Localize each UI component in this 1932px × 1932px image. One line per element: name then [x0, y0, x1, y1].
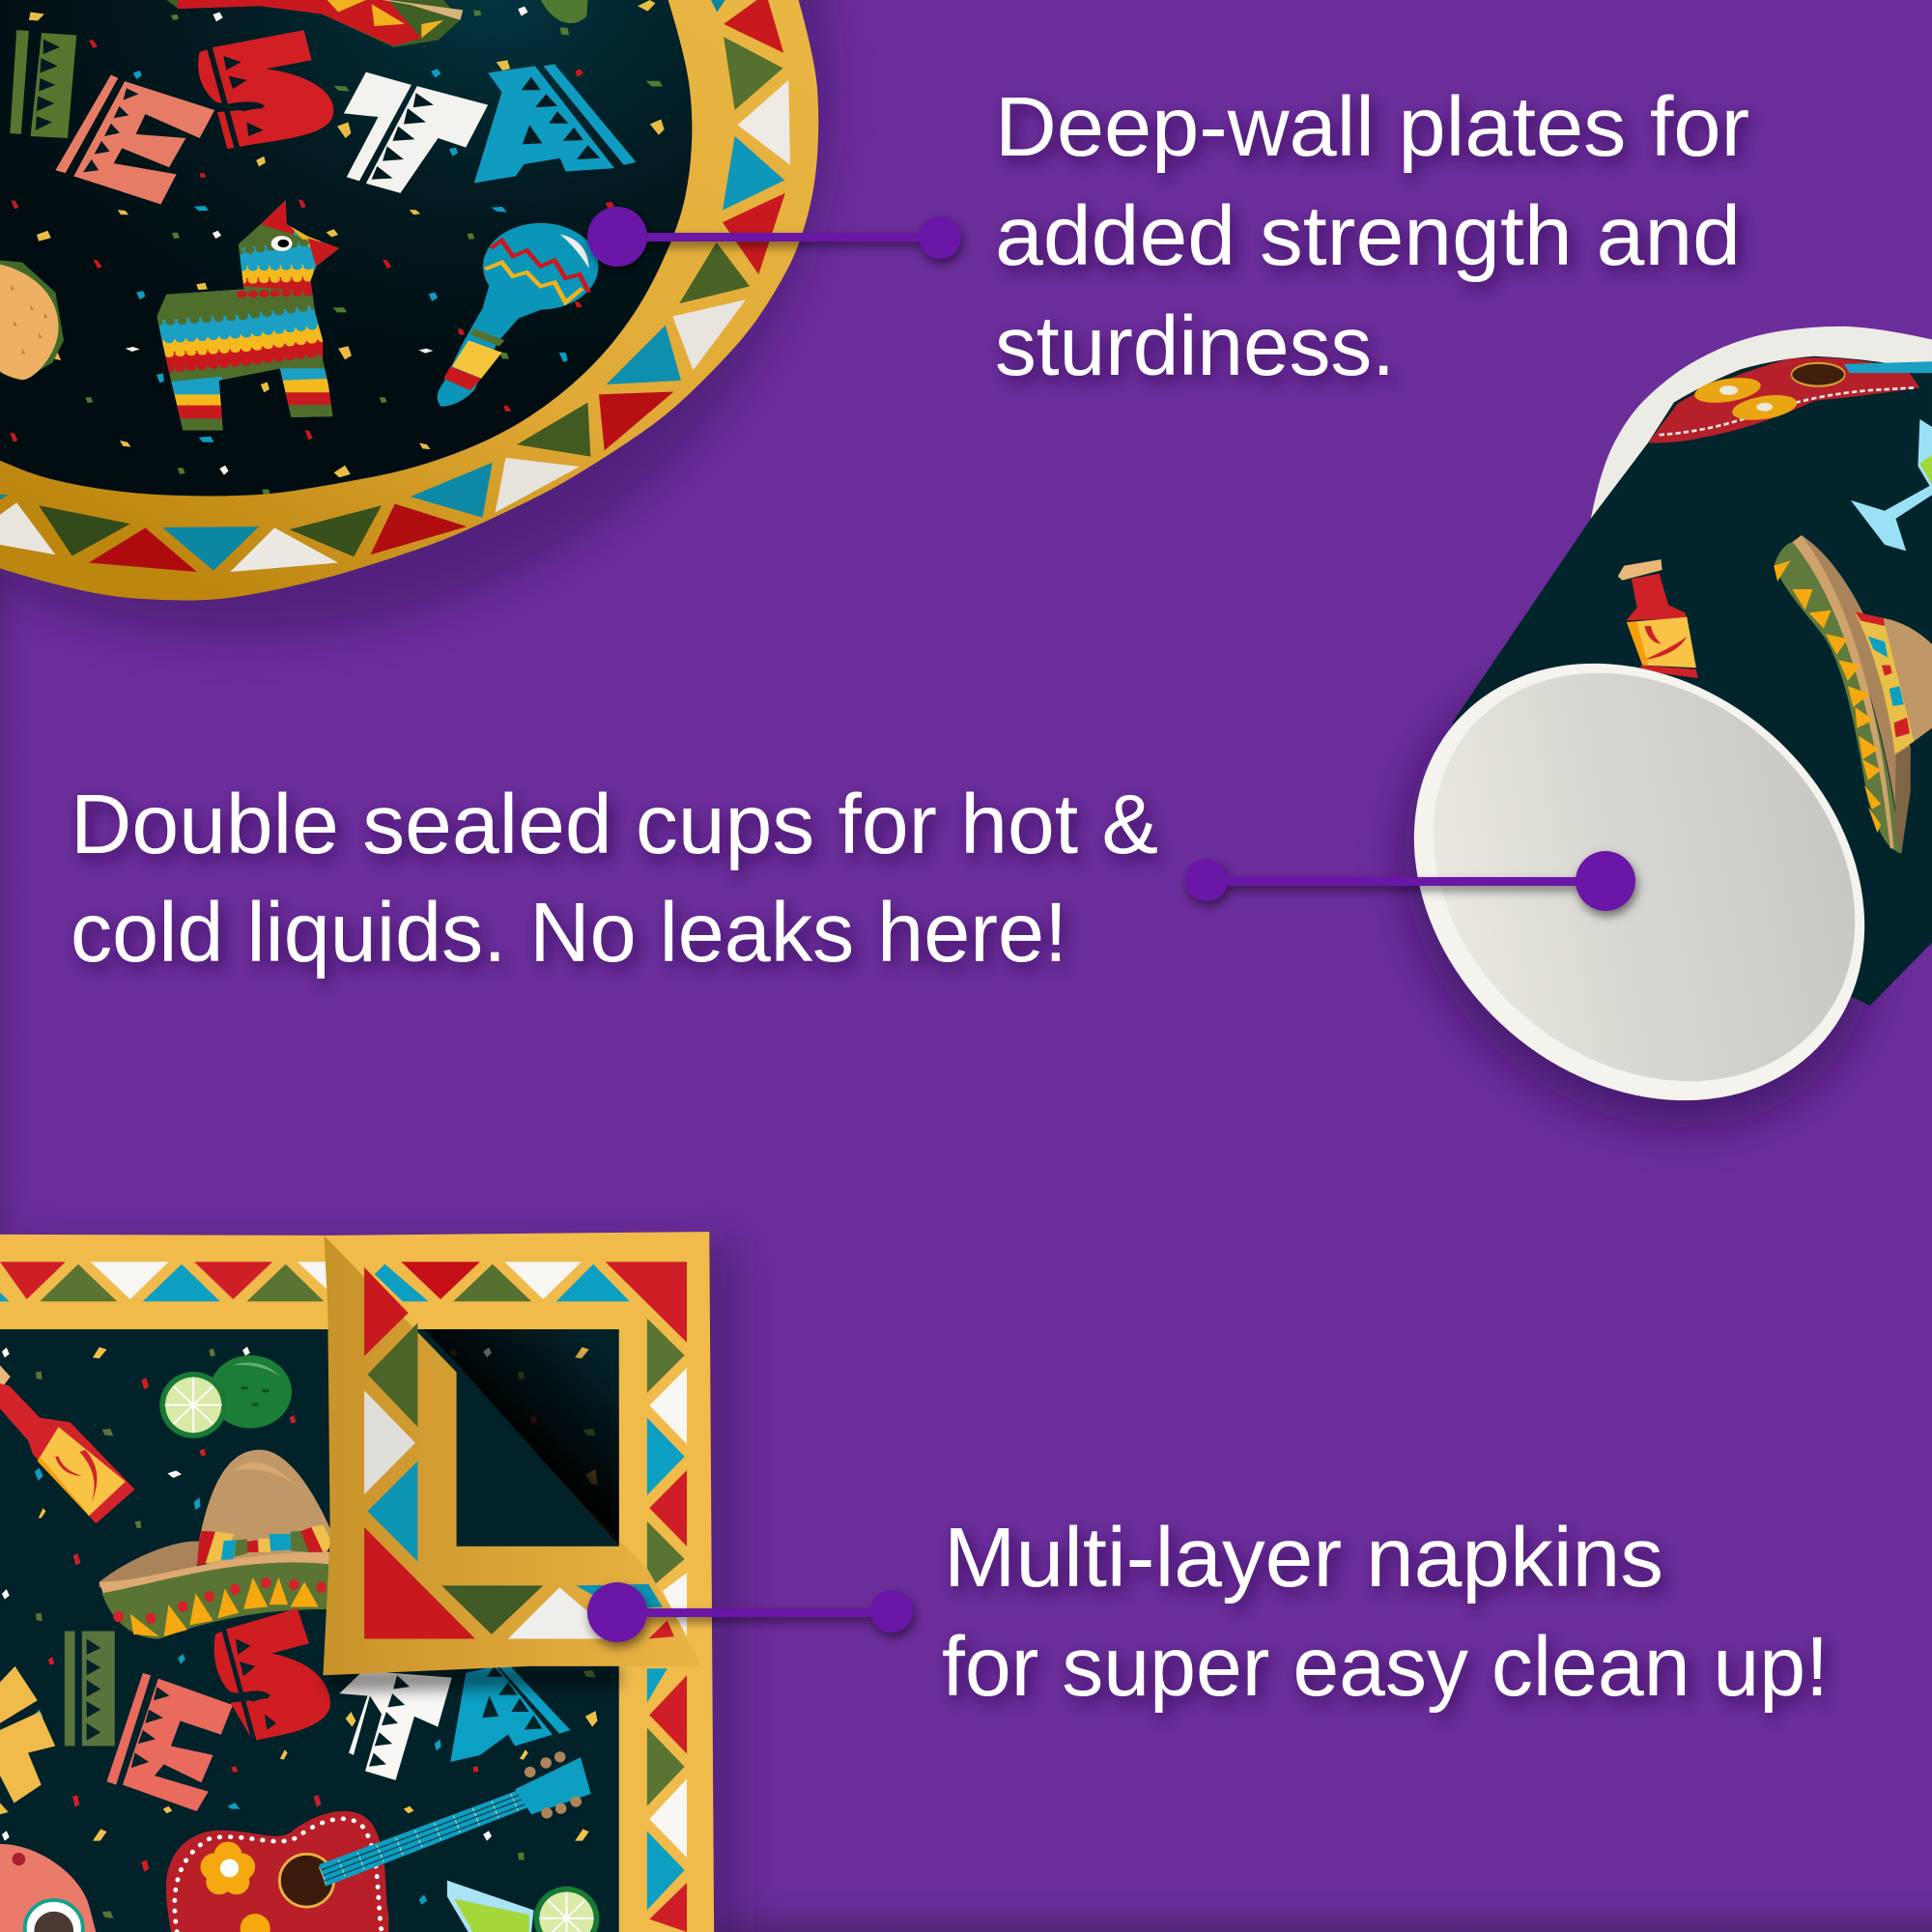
hot sauce on cup	[1618, 559, 1698, 678]
shadow: napkin	[19, 1241, 739, 1932]
letter A	[474, 64, 636, 183]
guitar	[166, 1751, 591, 1932]
plate with fiesta print	[0, 0, 818, 601]
sombrero	[99, 1450, 333, 1639]
hot sauce bottle	[0, 1365, 135, 1523]
napkin base	[0, 1232, 714, 1932]
cup body	[1452, 356, 1932, 1006]
cup base	[1325, 573, 1932, 1191]
letter I	[10, 30, 76, 138]
text: napkins: for super easy clean up!	[942, 1620, 1829, 1714]
letter F	[0, 1666, 55, 1814]
letter I	[65, 1632, 115, 1746]
lime	[159, 1355, 292, 1438]
shadow: cup	[1312, 576, 1932, 1221]
paper cup	[1325, 327, 1932, 1191]
text: plates: sturdiness.	[995, 299, 1395, 393]
napkin print	[0, 1329, 619, 1932]
connector: napkin	[587, 1582, 913, 1642]
plate print	[0, 0, 665, 495]
cactus top	[541, 0, 587, 23]
text: napkins	[942, 1511, 1829, 1714]
text: napkins: Multi-layer napkins	[944, 1511, 1663, 1605]
letter T	[339, 1671, 452, 1780]
letter E	[55, 75, 214, 204]
letter E	[107, 1673, 233, 1811]
text: plates: added strength and	[995, 189, 1741, 283]
letter A	[450, 1666, 570, 1762]
text: cups: cold liquids. No leaks here!	[71, 886, 1067, 980]
letter S	[214, 1608, 330, 1745]
cup side	[1452, 327, 1932, 1006]
napkin top border triangles	[0, 1262, 687, 1343]
margarita on cup	[1851, 419, 1932, 551]
rim triangles	[0, 0, 790, 572]
napkin with fiesta print	[0, 1232, 714, 1932]
text: cups	[71, 778, 1158, 980]
margarita glass	[447, 1881, 599, 1932]
sombrero top	[166, 0, 463, 47]
text: plates: Deep-wall plates for	[995, 80, 1749, 174]
guitar on cup	[1648, 357, 1932, 443]
folded napkin corner	[323, 1236, 702, 1675]
text: plates	[995, 80, 1749, 393]
letter T	[344, 72, 488, 193]
connector: plate	[587, 207, 961, 267]
shadow behind fold on dark print	[424, 1329, 619, 1547]
pinata	[156, 200, 340, 431]
plate rim	[0, 0, 818, 601]
sombrero on cup	[1774, 535, 1932, 854]
shadow: plate	[0, 0, 831, 638]
shadow under fold	[327, 1666, 619, 1691]
sugar skull	[0, 1844, 96, 1932]
cup rim	[1591, 327, 1932, 519]
text: cups: Double sealed cups for hot &	[71, 778, 1158, 871]
taco	[0, 260, 64, 381]
napkin confetti	[2, 1347, 597, 1918]
plate centre	[0, 0, 692, 496]
napkin right border triangles	[646, 1319, 687, 1932]
letter S	[198, 30, 333, 149]
connector: cup	[1185, 851, 1635, 911]
confetti	[10, 0, 665, 495]
maraca	[438, 223, 598, 407]
